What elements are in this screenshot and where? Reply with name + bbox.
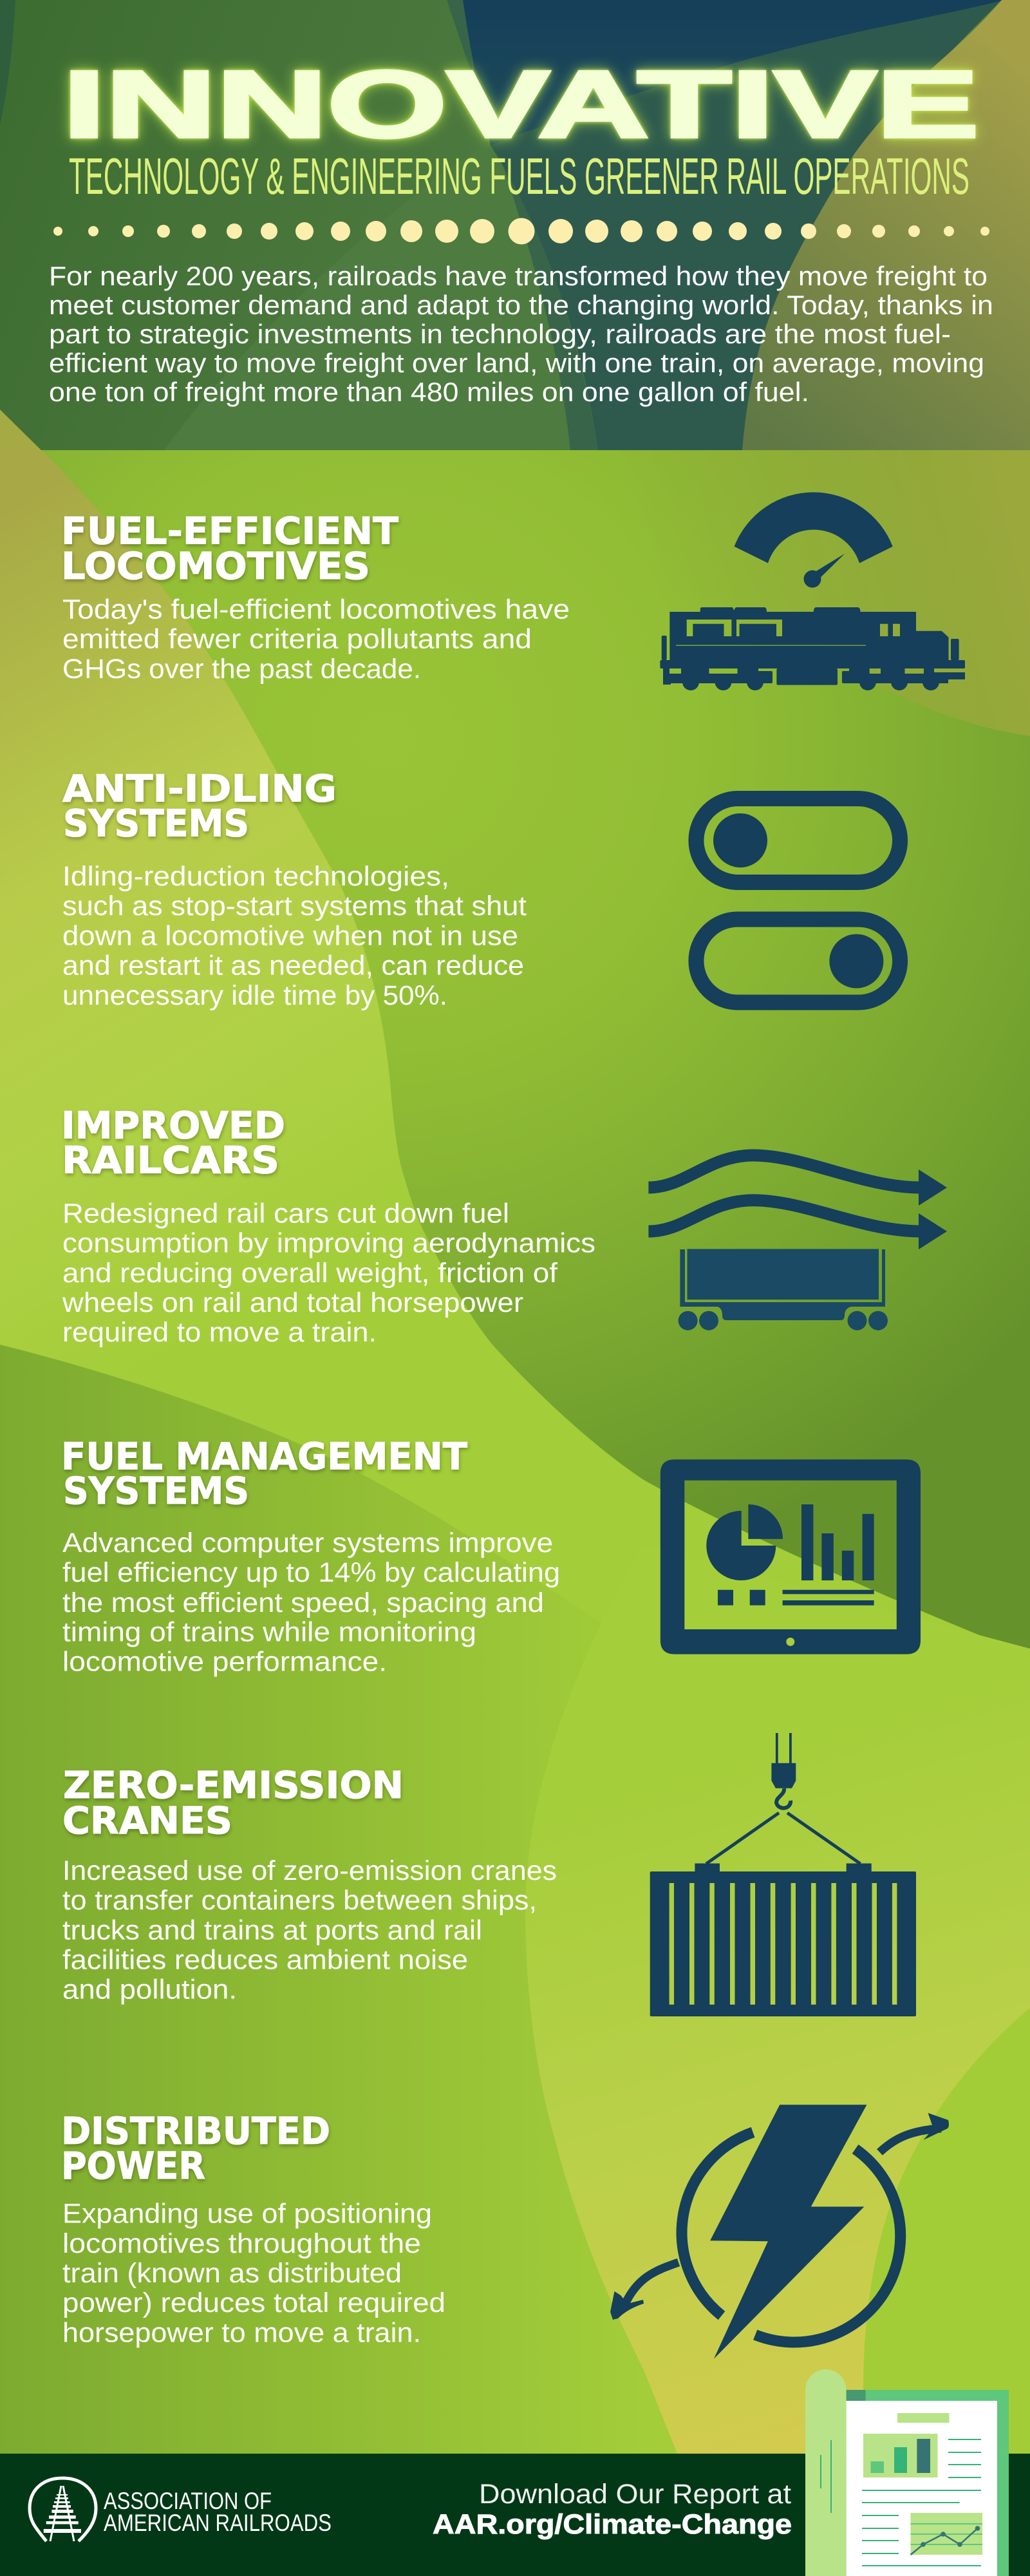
body text: emitted fewer criteria pollutants and [62, 623, 532, 654]
body text: wheels on rail and total horsepower [62, 1287, 523, 1318]
intro paragraph [49, 261, 993, 407]
mini bar chart [863, 2434, 937, 2477]
body text: and pollution. [62, 1975, 237, 2005]
body text: such as stop-start systems that shut [62, 891, 527, 922]
body text: power) reduces total required [62, 2287, 445, 2318]
body text: horsepower to move a train. [62, 2317, 421, 2348]
section: zero-emission cranes [62, 1733, 916, 2016]
body text [62, 1528, 560, 1677]
heading [61, 1104, 285, 1182]
body text: GHGs over the past decade. [62, 654, 421, 685]
heading: ANTI-IDLING [62, 766, 337, 810]
footer band [0, 2454, 1030, 2576]
body text: and restart it as needed, can reduce [62, 951, 524, 981]
intro paragraph: For nearly 200 years, railroads have transformed how they move freight to [49, 261, 988, 291]
heading: LOCOMOTIVES [61, 544, 370, 588]
body text: down a locomotive when not in use [62, 921, 518, 952]
heading [62, 1763, 404, 1842]
body text: locomotives throughout the [62, 2228, 421, 2259]
body text: Idling-reduction technologies, [62, 861, 449, 892]
body text [62, 594, 570, 685]
body text: Today's fuel-efficient locomotives have [62, 594, 570, 625]
heading: POWER [61, 2144, 205, 2188]
download call to action: Download Our Report at [479, 2479, 791, 2510]
body text: to transfer containers between ships, [62, 1885, 537, 1916]
section: fuel management systems [61, 1435, 921, 1677]
body text: the most efficient speed, spacing and [62, 1587, 544, 1618]
download call to action [433, 2479, 792, 2540]
body text: required to move a train. [62, 1317, 377, 1348]
heading [61, 2109, 330, 2188]
body text: locomotive performance. [62, 1646, 387, 1677]
heading: SYSTEMS [63, 1469, 249, 1513]
icon: report document [805, 2369, 1009, 2576]
body text: fuel efficiency up to 14% by calculating [62, 1557, 560, 1588]
intro paragraph: one ton of freight more than 480 miles on one gallon of fuel. [49, 377, 809, 407]
body text: Increased use of zero-emission cranes [62, 1855, 557, 1886]
header panel [0, 0, 1030, 450]
icon: airflow arrows over railcar [648, 1155, 947, 1331]
icon: tablet dashboard [660, 1459, 921, 1654]
section: anti-idling systems [62, 766, 900, 1011]
heading [61, 1435, 467, 1513]
body text: timing of trains while monitoring [62, 1616, 476, 1647]
section: improved railcars [61, 1104, 947, 1348]
body text: Expanding use of positioning [62, 2199, 432, 2230]
logo: Association of American Railroads: AMERICAN RAILROADS [104, 2510, 332, 2536]
intro paragraph: part to strategic investments in technology, railroads are the most fuel- [49, 319, 951, 349]
body text: trucks and trains at ports and rail [62, 1915, 482, 1946]
heading [61, 509, 398, 588]
heading: IMPROVED [61, 1104, 285, 1148]
section: fuel-efficient locomotives [61, 492, 965, 690]
body text [62, 1198, 595, 1348]
heading: FUEL-EFFICIENT [61, 509, 398, 553]
dotted divider [53, 218, 989, 245]
body text: facilities reduces ambient noise [62, 1945, 468, 1976]
heading: ZERO-EMISSION [63, 1763, 404, 1807]
title: INNOVATIVE [63, 52, 979, 157]
icon: gauge and locomotive [660, 492, 965, 690]
icon: toggle switches [696, 799, 900, 1002]
body text [62, 861, 527, 1011]
heading: CRANES [62, 1799, 232, 1842]
body text: Advanced computer systems improve [62, 1528, 553, 1558]
heading: RAILCARS [62, 1139, 279, 1182]
body text: Redesigned rail cars cut down fuel [62, 1198, 509, 1229]
body text: consumption by improving aerodynamics [62, 1227, 595, 1258]
intro paragraph: meet customer demand and adapt to the changing world. Today, thanks in [49, 290, 993, 320]
section: distributed power [61, 2105, 949, 2359]
logo: Association of American Railroads [30, 2478, 332, 2541]
download call to action: AAR.org/Climate-Change [433, 2509, 792, 2540]
body text: and reducing overall weight, friction of [62, 1258, 558, 1289]
heading: DISTRIBUTED [61, 2109, 330, 2153]
mini line chart [910, 2513, 982, 2555]
icon: crane hook and container [650, 1733, 916, 2016]
body text: unnecessary idle time by 50%. [62, 980, 447, 1011]
logo: Association of American Railroads: ASSOCIATION OF [104, 2488, 272, 2514]
intro paragraph: efficient way to move freight over land, with one train, on average, moving [49, 348, 984, 378]
heading: FUEL MANAGEMENT [61, 1435, 467, 1479]
body text [62, 2199, 445, 2348]
heading [62, 766, 337, 845]
heading: SYSTEMS [63, 801, 249, 845]
body text [62, 1855, 557, 2005]
body text: train (known as distributed [62, 2258, 402, 2289]
icon: lightning bolt with arrows [610, 2105, 949, 2359]
